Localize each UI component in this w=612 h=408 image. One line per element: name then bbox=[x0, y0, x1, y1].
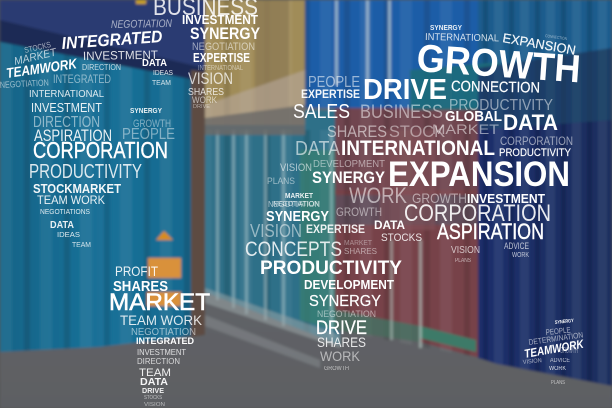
word cloud: right figure lower: ADVICE bbox=[504, 241, 529, 251]
word cloud: centre figure lower: SHARES bbox=[344, 247, 377, 256]
word: EXPANSION: EXPANSION bbox=[388, 155, 570, 194]
word cloud: centre figure upper: MARKET bbox=[432, 121, 500, 137]
word cloud: centre figure lower: WORK bbox=[320, 348, 361, 364]
word cloud: left figure head and torso: TEAM bbox=[72, 242, 91, 249]
word cloud: centre figure lower: EXPERTISE bbox=[306, 222, 365, 236]
pale reflection bands on ground bbox=[205, 288, 340, 348]
word cloud: top centre column: WORK bbox=[192, 95, 217, 105]
word cloud: left figure head and torso: ASPIRATION bbox=[34, 126, 112, 145]
word cloud: centre figure upper: GROWTH bbox=[412, 190, 467, 206]
word cloud: lower left figure base: STOCKS bbox=[144, 395, 163, 401]
word cloud: lower left figure base: DIRECTION bbox=[137, 357, 180, 366]
word cloud: left figure head and torso: INVESTMENT bbox=[83, 48, 159, 63]
word cloud: centre figure lower: SYNERGY bbox=[266, 208, 329, 225]
word cloud: lower left figure base: PROFIT bbox=[115, 263, 158, 279]
door rods on lower centre container bbox=[216, 130, 333, 338]
word cloud: lower left figure base: INVESTMENT bbox=[137, 348, 186, 357]
word cloud: top centre column bbox=[111, 0, 261, 110]
word cloud: left figure head and torso bbox=[0, 27, 175, 249]
word: DATA: DATA bbox=[503, 110, 558, 135]
word: GROWTH: GROWTH bbox=[415, 37, 582, 91]
word cloud: top right: SYNERGY bbox=[430, 25, 462, 32]
word cloud: right figure lower: PLANS bbox=[455, 258, 471, 264]
word cloud: lower left figure base: DRIVE bbox=[142, 388, 164, 395]
word cloud: top right: PRODUCTIVITY bbox=[499, 147, 572, 159]
word cloud: left figure head and torso: DATA bbox=[50, 220, 74, 231]
word cloud: top right: INTERNATIONAL bbox=[425, 32, 500, 44]
word cloud: bottom right small figure: PEOPLE bbox=[545, 325, 571, 337]
word cloud: lower left figure base: TEAM bbox=[139, 367, 171, 379]
word cloud: top right: GLOBAL bbox=[445, 108, 502, 125]
word cloud: left figure head and torso: MARKET bbox=[13, 46, 59, 68]
word cloud: centre figure lower: VISION bbox=[250, 221, 302, 241]
word cloud: left figure head and torso: NEGOTIATIONS bbox=[40, 209, 90, 216]
tan rusty container bbox=[200, 0, 305, 125]
rust post bbox=[191, 70, 205, 337]
word cloud: left figure head and torso: TEAM bbox=[152, 80, 171, 87]
word cloud: centre figure lower: CONCEPTS bbox=[245, 238, 342, 261]
word cloud: top right: CONNECTION bbox=[451, 78, 540, 97]
maroon container bbox=[335, 108, 480, 358]
word cloud: lower left figure base: DATA bbox=[140, 377, 168, 388]
word: DRIVE: DRIVE bbox=[363, 74, 447, 106]
word cloud: left figure head and torso: PEOPLE bbox=[122, 126, 175, 143]
word cloud: centre figure upper: SHARES bbox=[327, 122, 387, 141]
word cloud: bottom right small figure: DETERMINATION bbox=[528, 330, 584, 347]
word cloud: centre figure upper bbox=[267, 74, 570, 208]
word cloud: centre figure lower: DRIVE bbox=[316, 318, 367, 339]
word cloud: bottom right small figure bbox=[523, 318, 586, 386]
word cloud: bottom right small figure: PLANS bbox=[551, 380, 566, 386]
navy container bbox=[478, 48, 612, 386]
word cloud: left figure head and torso: IDEAS bbox=[57, 232, 80, 239]
word cloud: centre figure lower bbox=[245, 200, 422, 372]
word cloud: top right: PRODUCTIVITY bbox=[449, 97, 553, 114]
bright blue container bbox=[305, 0, 480, 108]
word cloud: left figure head and torso: INTERNATIONAL bbox=[29, 89, 104, 100]
word cloud: centre figure lower: GROWTH bbox=[336, 205, 382, 219]
word cloud: centre figure lower: STOCKS bbox=[381, 232, 422, 244]
word cloud: lower left figure base bbox=[109, 263, 210, 408]
word cloud: top centre column: EXPERTISE bbox=[193, 50, 250, 65]
word cloud: left figure head and torso: DATA bbox=[142, 58, 167, 69]
word cloud: bottom right small figure: WORK bbox=[549, 366, 566, 372]
word cloud: bottom right small figure: VISION bbox=[523, 358, 542, 366]
word cloud: centre figure upper: EXPERTISE bbox=[301, 87, 360, 101]
word cloud: top right: EXPANSION bbox=[501, 30, 577, 58]
word: CORPORATION: CORPORATION bbox=[404, 200, 551, 227]
word cloud: centre figure upper: DEVELOPMENT bbox=[313, 159, 385, 170]
word: INTEGRATED: INTEGRATED bbox=[61, 27, 163, 53]
lower centre blue container bbox=[200, 110, 340, 345]
word: CORPORATION: CORPORATION bbox=[33, 137, 168, 163]
word cloud: centre figure lower: SHARES bbox=[317, 334, 366, 350]
word cloud: lower left figure base: SHARES bbox=[113, 278, 168, 295]
word cloud: centre figure upper: WORK bbox=[349, 183, 407, 208]
word cloud: left figure head and torso: IDEAS bbox=[153, 70, 173, 77]
word cloud: right figure lower: VISION bbox=[451, 245, 480, 256]
word: INTERNATIONAL: INTERNATIONAL bbox=[341, 137, 495, 160]
word cloud: top centre column: NEGOTIATION bbox=[192, 41, 255, 53]
word cloud: bottom right small figure: ADVICE bbox=[550, 358, 570, 364]
word cloud: centre figure upper: NEGOTIATION bbox=[273, 201, 319, 208]
word cloud: left figure head and torso: STOCKMARKET bbox=[33, 181, 121, 196]
word cloud: centre figure lower: GROWTH bbox=[324, 366, 349, 372]
hazard labels bbox=[156, 231, 173, 240]
word cloud: right figure lower: WORK bbox=[512, 252, 529, 259]
word cloud: centre figure upper: STOCK bbox=[389, 122, 446, 141]
word cloud: left figure head and torso: PRODUCTIVITY bbox=[29, 161, 142, 183]
word cloud: left figure head and torso: GROWTH bbox=[133, 118, 171, 130]
word cloud: left figure head and torso: INVESTMENT bbox=[31, 100, 102, 115]
word: TEAMWORK: TEAMWORK bbox=[5, 55, 78, 81]
word cloud: right figure lower: ASPIRATION bbox=[437, 219, 544, 244]
word cloud: centre figure upper: VISION bbox=[280, 162, 312, 174]
word cloud: top right: CONNECTION bbox=[545, 33, 567, 41]
word cloud: top centre column: INTERNATIONAL bbox=[198, 65, 243, 72]
word cloud: top centre column: DRIVE bbox=[193, 104, 211, 110]
word cloud: left figure head and torso: TEAM WORK bbox=[37, 193, 105, 207]
word cloud: top centre column: INVESTMENT bbox=[182, 12, 258, 27]
word cloud: centre figure upper: PEOPLE bbox=[308, 74, 360, 91]
word: TEAMWORK: TEAMWORK bbox=[523, 337, 586, 361]
word cloud: centre figure upper: SALES bbox=[293, 101, 350, 123]
word cloud: centre figure lower: NEGOTIATION bbox=[317, 309, 376, 319]
word cloud: left figure head and torso: INTEGRATED bbox=[53, 72, 111, 86]
word cloud: lower left figure base: VISION bbox=[144, 402, 165, 408]
word cloud: lower left figure base: NEGOTIATION bbox=[131, 327, 196, 338]
word cloud: centre figure lower: DEVELOPMENT bbox=[304, 277, 394, 292]
word cloud: bottom right small figure: SYNERGY bbox=[555, 318, 575, 326]
word cloud: centre figure upper: SYNERGY bbox=[312, 168, 386, 187]
word cloud: top right bbox=[415, 25, 582, 159]
upper right teal container bbox=[478, 0, 612, 72]
word cloud: centre figure lower: NEGOTIATION bbox=[268, 200, 320, 209]
word cloud: lower left figure base: TEAM WORK bbox=[120, 312, 203, 328]
word cloud: right figure lower bbox=[404, 200, 551, 264]
word cloud: top centre column: VISION bbox=[188, 69, 233, 88]
word: PRODUCTIVITY: PRODUCTIVITY bbox=[260, 258, 402, 279]
word cloud: left figure head and torso: SYNERGY bbox=[130, 108, 162, 115]
word cloud: centre figure upper: INVESTMENT bbox=[467, 191, 545, 206]
word cloud: centre figure upper: MARKET bbox=[285, 193, 314, 200]
word cloud: centre figure lower: MARKET bbox=[344, 240, 373, 247]
word cloud: left figure head and torso: NEGOTIATION bbox=[0, 77, 49, 90]
word cloud: bottom right small figure: GROWTH bbox=[560, 346, 578, 355]
word cloud: left figure head and torso: STOCKS bbox=[23, 40, 52, 55]
word: MARKET: MARKET bbox=[109, 289, 210, 316]
word cloud: centre figure upper: BUSINESS bbox=[360, 102, 443, 123]
word cloud: lower left figure base: INTEGRATED bbox=[136, 336, 194, 346]
word cloud: centre figure lower: DATA bbox=[374, 218, 405, 232]
left navy top bbox=[0, 0, 205, 70]
word cloud: left figure head and torso: DIRECTION bbox=[82, 63, 121, 72]
word cloud: top right: CORPORATION bbox=[500, 134, 573, 148]
word cloud: centre figure lower: SYNERGY bbox=[309, 293, 381, 310]
word cloud: top centre column: SHARES bbox=[188, 87, 224, 98]
word cloud: top centre column: NEGOTIATION bbox=[111, 18, 172, 31]
left teal container bbox=[0, 0, 205, 352]
word cloud: top centre column: SYNERGY bbox=[190, 24, 261, 43]
upper middle band bbox=[410, 62, 500, 110]
word cloud: left figure head and torso: DIRECTION bbox=[33, 114, 100, 131]
word cloud: centre figure upper: PLANS bbox=[267, 176, 295, 186]
word cloud: centre figure upper: DATA bbox=[295, 138, 341, 160]
